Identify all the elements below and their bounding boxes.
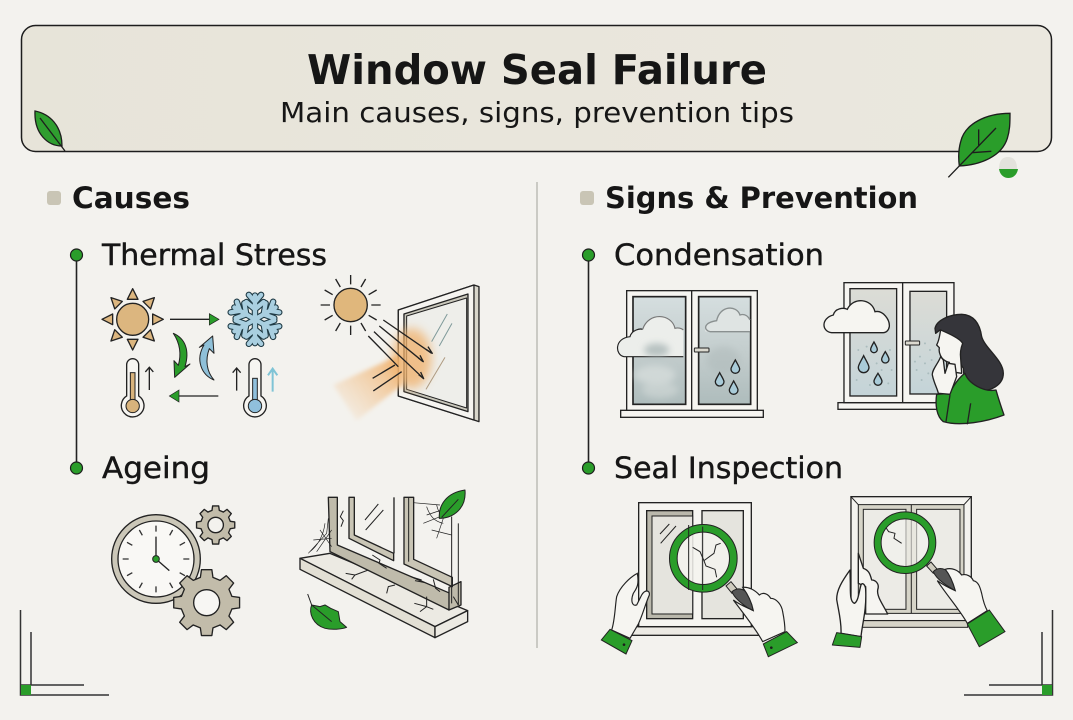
title: Window Seal Failure [307,46,767,94]
panel divider [536,182,538,648]
heat glow [333,328,432,421]
sill [300,553,468,638]
arrow: return [169,390,218,402]
icon: warm thermometer [121,359,153,417]
illustration: sun on window [321,275,479,422]
signs timeline [582,249,594,474]
left hand on window two [832,553,888,647]
water drops [715,360,740,394]
glass reflections [426,314,452,389]
condensation speckles [856,342,933,386]
icon: cold thermometer [233,359,277,417]
icon: fallen leaf [308,594,347,629]
handle [905,341,920,345]
left hand [612,573,649,638]
icon: leaf on web [439,490,465,518]
heading: thermal stress: Thermal Stress [101,238,327,272]
icon: clock [112,515,200,603]
frame [621,291,763,417]
heading: seal inspection: Seal Inspection [614,451,843,485]
cloud [824,301,889,333]
corner bracket: bottom right [964,610,1052,695]
icon: large gear [174,570,240,636]
arrow: blue curve [199,336,214,380]
right cuff [763,632,797,657]
frame [632,503,760,635]
fog patches [634,343,740,398]
sun disc [321,275,381,335]
handle [927,562,956,591]
right cuff [967,610,1005,647]
glass reflection [365,504,383,530]
handle [726,582,753,612]
lens [878,515,932,570]
icon: small gear [197,506,235,544]
window frame [328,497,461,610]
heading: condensation: Condensation [614,238,824,272]
causes heading: Causes [72,181,190,215]
sun rays [368,320,432,391]
icon: small leaf top left [35,111,65,151]
illustration: fogged window [618,291,763,417]
lens [673,525,733,590]
illustration: inspecting window two [851,497,1005,647]
signs heading: Signs & Prevention [605,181,918,215]
back fingers [858,553,888,614]
cracks [340,511,458,612]
illustration: thermal cycle [102,289,281,417]
frame [838,283,954,409]
icon: large leaf top right [948,113,1010,177]
hair back [935,314,1003,390]
illustration: clock and gears [112,506,240,636]
background cloud [705,308,750,332]
hand [932,357,957,394]
subtitle: Main causes, signs, prevention tips [280,96,794,129]
right hand [733,587,785,642]
arrow: green curve [173,333,190,377]
causes timeline [70,249,82,474]
panel: causes [47,181,479,638]
water drops [858,342,889,385]
foreground cloud [618,317,683,357]
left cuff [601,629,632,654]
panel: signs and prevention [580,181,1005,657]
window frame [398,285,479,422]
cuff [832,633,862,647]
right hand [937,569,987,623]
illustration: woman [932,314,1004,424]
header banner [22,26,1052,152]
handle [694,348,709,352]
icon: small half bulb [999,157,1018,178]
shirt [936,373,1004,424]
shirt folds [946,395,971,424]
icon: snowflake [229,295,281,344]
frame [851,497,971,627]
illustration: window with speckled condensation [824,283,954,409]
cobwebs [308,503,452,553]
icon: sun [102,289,163,350]
palm and thumb [837,570,866,637]
heading: ageing: Ageing [102,451,210,485]
arrow: sun to snowflake [170,314,219,325]
neck and face [937,330,963,373]
corner bracket: bottom left [20,610,109,695]
illustration: inspecting window one [601,503,797,657]
illustration: aged window sill [300,490,468,638]
